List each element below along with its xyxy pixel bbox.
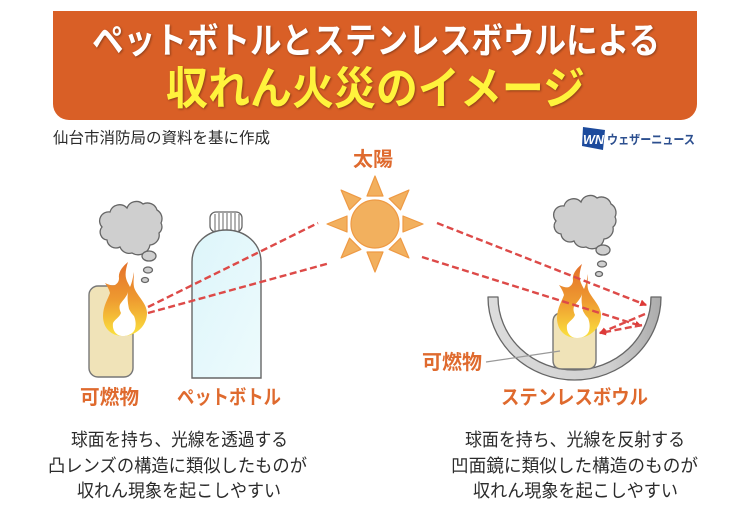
- text block: right explanation: 凹面鏡に類似した構造のものが: [451, 456, 698, 476]
- label: stainless bowl: ステンレスボウル: [501, 386, 648, 409]
- title banner: [53, 11, 697, 120]
- stainless bowl: [488, 297, 661, 380]
- sun label: 太陽: [353, 148, 393, 171]
- label: combustible (bowl): 可燃物: [422, 351, 482, 374]
- right combustible block: [553, 313, 596, 369]
- left flame: [103, 262, 147, 336]
- right flame: [557, 264, 601, 338]
- text block: left explanation: [48, 430, 307, 501]
- text block: right explanation: 収れん現象を起こしやすい: [473, 481, 678, 501]
- logo: weathernews: ウェザーニュース: [607, 133, 695, 147]
- title line 1: ペットボトルとステンレスボウルによる: [92, 20, 660, 61]
- left labels: ペットボトル: [177, 386, 281, 409]
- icon: sun: [327, 176, 423, 272]
- rays through bottle: [148, 223, 330, 313]
- left labels: [80, 386, 281, 409]
- leader line: [486, 351, 560, 362]
- bottle body: [192, 230, 261, 378]
- text block: left explanation: 凸レンズの構造に類似したものが: [48, 456, 307, 476]
- text block: right explanation: 球面を持ち、光線を反射する: [465, 430, 685, 450]
- left smoke: [100, 201, 162, 282]
- text block: left explanation: 収れん現象を起こしやすい: [77, 481, 281, 501]
- rays reflected by bowl: [422, 223, 646, 333]
- logo: weathernews: [582, 127, 695, 150]
- left combustible block: [89, 286, 133, 377]
- left labels: 可燃物: [80, 386, 139, 409]
- source note: 仙台市消防局の資料を基に作成: [53, 129, 270, 147]
- logo: weathernews: WN: [583, 132, 605, 147]
- title line 2: 収れん火災のイメージ: [166, 63, 585, 114]
- bottle cap: [210, 212, 242, 232]
- text block: right explanation: [451, 430, 698, 501]
- text block: left explanation: 球面を持ち、光線を透過する: [71, 430, 288, 450]
- right smoke: [554, 195, 616, 276]
- plastic bottle: [192, 212, 261, 378]
